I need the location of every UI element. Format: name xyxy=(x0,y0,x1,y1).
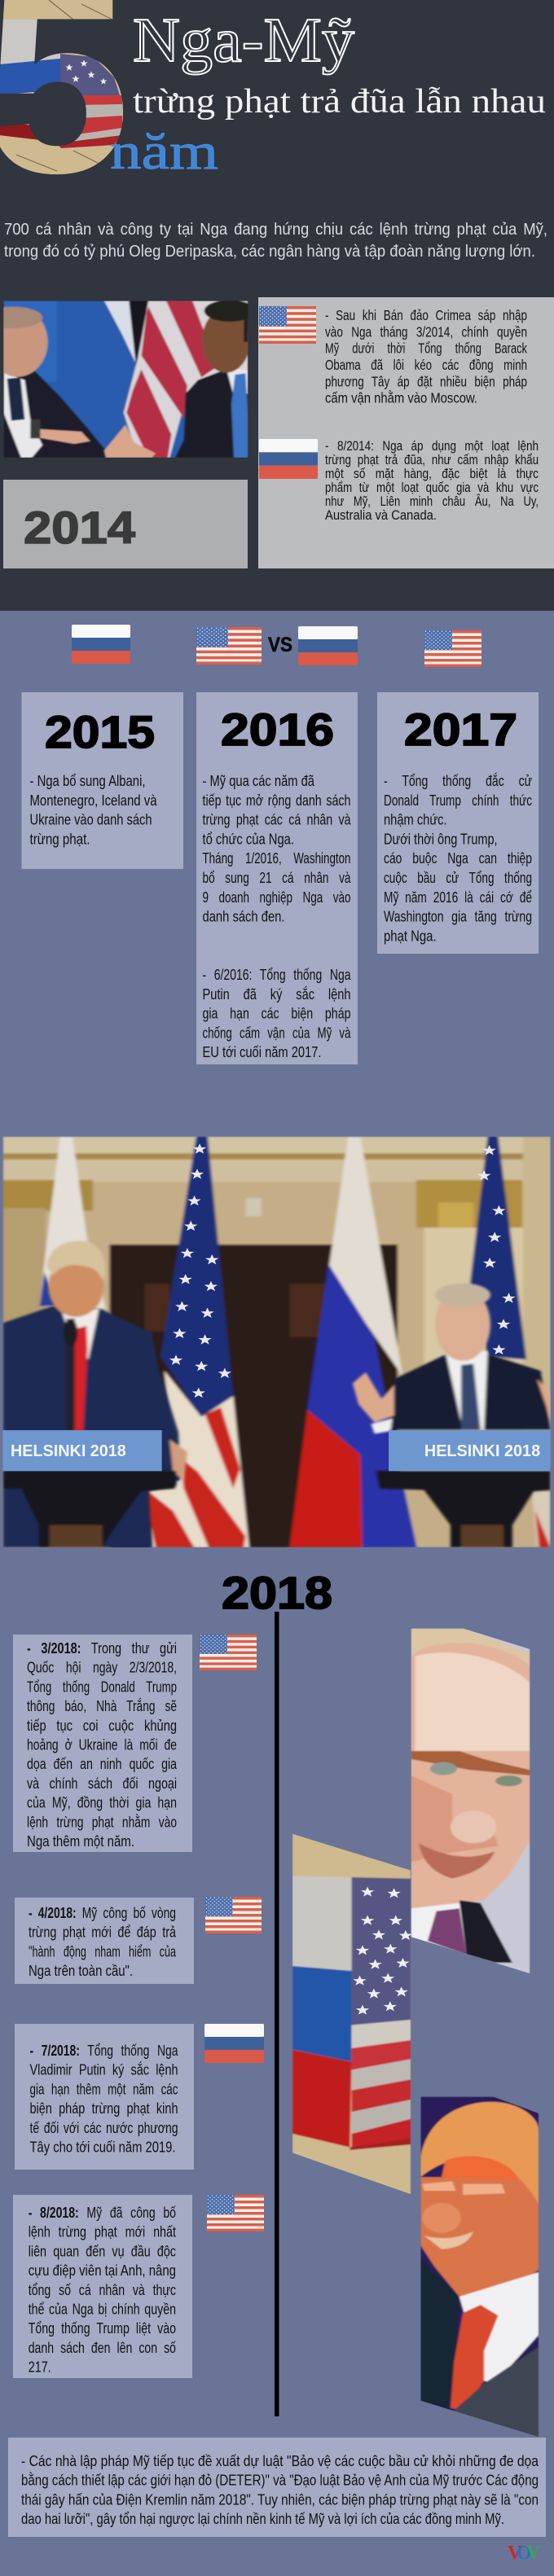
podium sign right xyxy=(389,1430,552,1471)
photo: Trump and Putin in Helsinki 2018 xyxy=(2,1136,552,1547)
title: Nga-Mỹ: Nga-Mỹ xyxy=(133,5,355,75)
icon: US flag xyxy=(259,306,316,344)
header: number 5 filled with flags and map xyxy=(0,0,124,174)
text: 2017 events: nhậm chức. xyxy=(384,811,447,828)
text: 2016 Putin decree: EU tới cuối năm 2017. xyxy=(202,1043,321,1060)
text: March 2018: - 3/2018: Trong thư gửi xyxy=(27,1639,177,1657)
text: 2016 US sanctions xyxy=(202,772,351,925)
text: July 2018: gia hạn thêm một năm các xyxy=(29,2080,178,2097)
year box 2014 xyxy=(3,480,248,568)
year 2017: 2017 xyxy=(404,704,517,755)
icon: US flag August xyxy=(207,2195,264,2232)
text: 2016 US sanctions: tổ chức của Nga. xyxy=(202,830,294,847)
blue-grey section background xyxy=(0,611,554,2576)
text: Russian response 2014: Australia và Canada. xyxy=(325,507,437,523)
text: March 2018: Tổng thống Donald Trump xyxy=(27,1678,177,1695)
text: March 2018: dọa đến an ninh quốc gia xyxy=(27,1755,178,1772)
text: conclusion xyxy=(21,2452,539,2527)
icon: US flag March xyxy=(200,1635,257,1670)
text: March 2018: tiếp tục coi cuộc khủng xyxy=(27,1717,177,1734)
panel: 2015 xyxy=(21,692,183,869)
text: July 2018: Tây cho tới cuối năm 2019. xyxy=(29,2139,176,2155)
podium sign left xyxy=(2,1430,162,1471)
text: July 2018: tế đối với các nước phương xyxy=(29,2119,178,2136)
title: năm: năm xyxy=(110,123,218,180)
text: 2015 events: Montenegro, Iceland và xyxy=(29,792,157,809)
text: 2015 events: - Nga bổ sung Albani, xyxy=(29,772,145,789)
text: 2015 events xyxy=(29,772,157,847)
label: vs: VS xyxy=(268,634,292,656)
text: 2016 US sanctions: 9 doanh nghiệp Nga vào xyxy=(202,889,350,906)
panel: 2016 xyxy=(196,692,358,1064)
logo: VOV xyxy=(508,2543,541,2564)
photo: Putin and Obama handshake xyxy=(0,300,255,458)
collage: Trump portrait xyxy=(420,2096,539,2438)
icon: US flag April xyxy=(205,1897,262,1933)
panel: 2017 xyxy=(377,692,539,954)
icon: Russian flag July xyxy=(204,2024,264,2063)
panel: 2014 events xyxy=(258,297,554,568)
text: August 2018: liên quan đến vụ đầu độc xyxy=(29,2242,176,2259)
text: 2016 US sanctions: trừng phạt các cá nhân và xyxy=(202,811,351,828)
text: March 2018: Quốc hội ngày 2/3/2018, xyxy=(27,1659,177,1676)
text: 2017 events: phạt Nga. xyxy=(384,927,437,944)
year heading 2018: 2018 xyxy=(222,1567,332,1618)
panel: July 2018 xyxy=(15,2024,194,2170)
text: 2016 Putin decree xyxy=(202,966,351,1060)
text: 2016 US sanctions: bổ sung 21 cá nhân và xyxy=(202,869,351,886)
podium sign left: HELSINKI 2018 xyxy=(11,1441,126,1459)
text: July 2018: Vladimir Putin ký sắc lệnh xyxy=(29,2061,178,2078)
text: March 2018: thông báo, Nhà Trắng sẽ xyxy=(27,1697,177,1714)
year 2016: 2016 xyxy=(221,704,334,755)
panel: August 2018 xyxy=(13,2195,192,2378)
collage: Putin portrait xyxy=(411,1628,530,1976)
text: August 2018: lệnh trừng phạt mới nhất xyxy=(29,2223,176,2240)
timeline vertical line xyxy=(275,1612,279,2416)
logo: VOV: O xyxy=(517,2543,532,2564)
text: 2015 events: trừng phạt. xyxy=(29,830,90,847)
icon: Russian flag xyxy=(259,439,318,479)
icon: US flag 2016 xyxy=(196,627,262,665)
text: August 2018: cựu điệp viên tại Anh, nâng xyxy=(29,2262,176,2279)
text: August 2018: Tổng thống Trump liệt vào xyxy=(29,2319,176,2337)
intro paragraph xyxy=(4,221,547,261)
text: August 2018: 217. xyxy=(29,2359,51,2376)
text: 2016 Putin decree: gia hạn các biện pháp xyxy=(202,1005,350,1022)
text: July 2018 xyxy=(29,2042,178,2155)
title: trừng phạt trả đũa lẫn nhau: trừng phạt trả đũa lẫn nhau xyxy=(133,83,546,121)
text: 2016 Putin decree: Putin đã ký sắc lệnh xyxy=(202,985,350,1003)
year box 2014: 2014 xyxy=(24,502,135,553)
icon: US flag 2017 xyxy=(424,630,481,667)
text: 2016 Putin decree: chống cấm vận của Mỹ và xyxy=(202,1024,351,1041)
text: 2016 US sanctions: danh sách đen. xyxy=(202,908,285,925)
text: July 2018: - 7/2018: Tổng thống Nga xyxy=(29,2042,178,2059)
panel: March 2018 xyxy=(13,1635,192,1852)
text: March 2018: và chính sách đối ngoại xyxy=(27,1775,177,1792)
text: March 2018: lệnh trừng phạt nhằm vào xyxy=(27,1813,177,1830)
dark header background xyxy=(0,0,554,611)
text: 2016 US sanctions: tiếp tục mở rộng danh sách xyxy=(202,792,350,809)
text: April 2018 xyxy=(29,1904,177,1979)
logo: VOV: V xyxy=(526,2543,541,2564)
text: March 2018 xyxy=(27,1639,178,1850)
text: 2016 Putin decree: - 6/2016: Tổng thống Nga xyxy=(202,966,351,983)
text: August 2018: thể của Nga bị chính quyền xyxy=(29,2300,176,2318)
text: US sanctions 2014 xyxy=(325,307,527,406)
text: August 2018: tổng số cá nhân và thực xyxy=(29,2281,176,2298)
text: April 2018: Nga trên toàn cầu". xyxy=(29,1962,133,1979)
text: March 2018: Nga thêm một năm. xyxy=(27,1832,134,1850)
text: August 2018: danh sách đen lên con số xyxy=(29,2339,176,2356)
text: Russian response 2014 xyxy=(325,438,539,523)
text: 2016 US sanctions: - Mỹ qua các năm đã xyxy=(202,772,315,789)
collage: flag and map piece xyxy=(292,1832,412,2196)
text: April 2018: trừng phạt mới để đáp trả xyxy=(29,1924,177,1941)
logo: VOV: V xyxy=(508,2543,522,2564)
text: August 2018 xyxy=(29,2204,176,2376)
text: 2015 events: Ukraine vào danh sách xyxy=(29,811,152,828)
icon: Russian flag 2016 xyxy=(298,626,358,665)
year 2015: 2015 xyxy=(45,706,155,757)
text: April 2018: - 4/2018: Mỹ công bố vòng xyxy=(29,1904,176,1921)
text: August 2018: - 8/2018: Mỹ đã công bố xyxy=(29,2204,176,2221)
panel: April 2018 xyxy=(15,1898,194,1984)
text: March 2018: hoảng ở Ukraine là mối đe xyxy=(27,1736,177,1753)
text: March 2018: của Mỹ, đồng thời gia hạn xyxy=(27,1794,177,1811)
text: US sanctions 2014: cấm vận nhằm vào Moscow. xyxy=(325,389,477,406)
text: April 2018: "hành động nham hiểm của xyxy=(29,1942,176,1959)
icon: Russian flag 2015 xyxy=(72,625,130,664)
text: 2017 events xyxy=(384,772,532,944)
panel: conclusion xyxy=(8,2438,546,2537)
text: 2017 events: Dưới thời ông Trump, xyxy=(384,830,498,847)
text: July 2018: biện pháp trừng phạt kinh xyxy=(29,2100,178,2117)
text: 2016 US sanctions: Tháng 1/2016, Washington xyxy=(202,849,350,867)
